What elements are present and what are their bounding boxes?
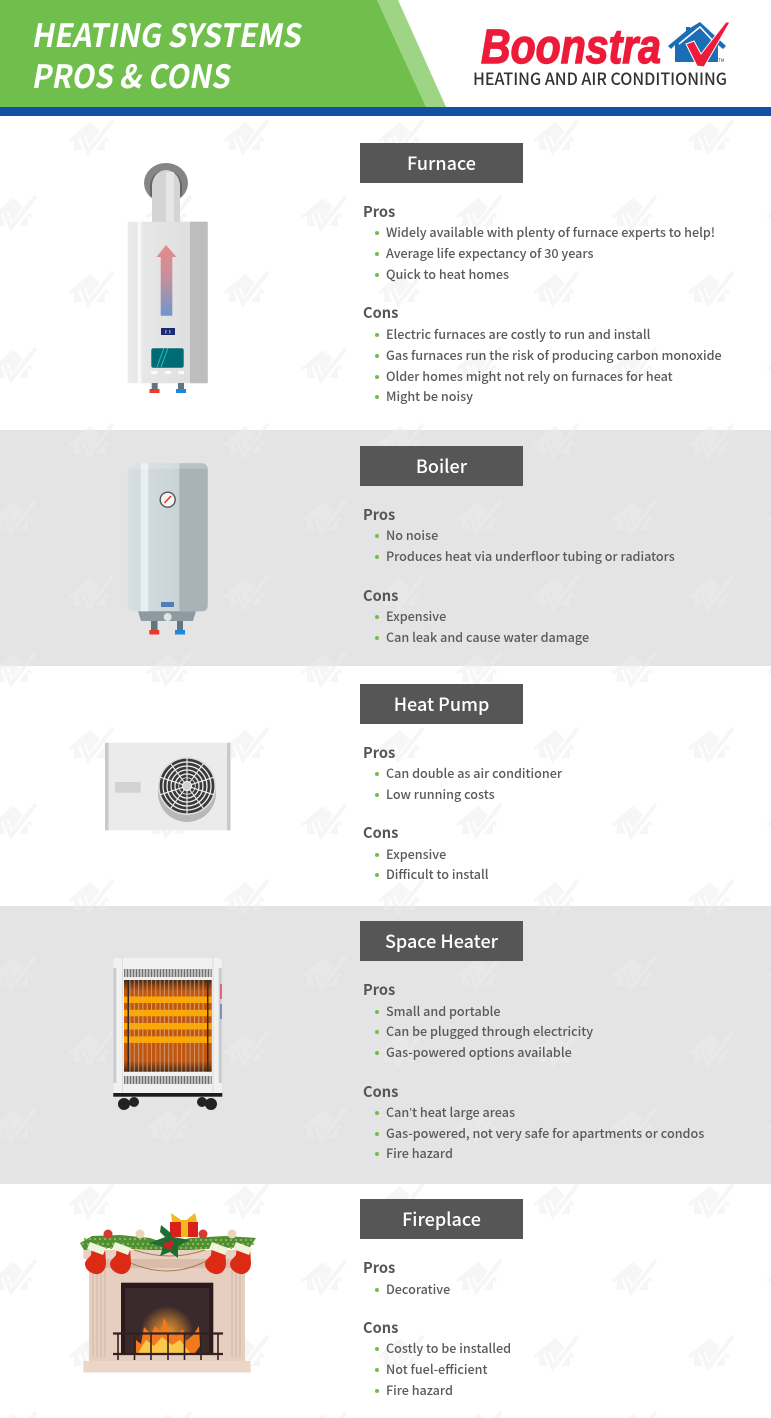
cons list: boiler: Expensive: [386, 606, 446, 625]
title: PROS & CONS: [30, 52, 236, 98]
pros list: boiler: Produces heat via underfloor tubing or radiators: [386, 546, 675, 565]
heading: fireplace: [360, 1199, 523, 1239]
panel: furnace: [360, 143, 722, 405]
cons list: space heater: [363, 1081, 704, 1162]
cons list: space heater: Can’t heat large areas: [386, 1102, 515, 1121]
panel: heat pump: [360, 684, 563, 883]
title: [30, 11, 307, 98]
heading: furnace: Furnace: [407, 150, 476, 176]
cons list: heat pump: Expensive: [386, 844, 446, 863]
stockings: [85, 1245, 106, 1274]
pros list: space heater: Can be plugged through electricity: [386, 1021, 593, 1040]
pros list: furnace: Quick to heat homes: [386, 264, 509, 283]
pros list: furnace: Pros: [363, 201, 395, 222]
pros list: space heater: [363, 979, 593, 1061]
header banner: [0, 0, 771, 116]
cons list: fireplace: Not fuel-efficient: [386, 1359, 487, 1378]
icon: heat pump: [105, 743, 230, 830]
heading: furnace: [360, 143, 523, 183]
icon: furnace: [128, 163, 208, 393]
cons list: fireplace: [363, 1317, 511, 1399]
pros list: fireplace: [363, 1257, 450, 1298]
cons list: boiler: Cons: [363, 585, 398, 606]
pros list: space heater: Pros: [363, 979, 395, 1000]
heading: space heater: [360, 921, 523, 961]
cons list: furnace: Might be noisy: [386, 386, 473, 405]
pros list: boiler: Pros: [363, 504, 395, 525]
icon: space heater: [113, 958, 222, 1110]
cons list: fireplace: Cons: [363, 1317, 398, 1338]
band: space heater background: [0, 906, 771, 1184]
cons list: boiler: [363, 585, 589, 646]
pros list: furnace: Average life expectancy of 30 years: [386, 243, 594, 262]
icon: boiler: [128, 463, 208, 634]
cons list: furnace: Cons: [363, 302, 398, 323]
band: boiler background: [0, 430, 771, 666]
heading: boiler: [360, 446, 523, 486]
pros list: fireplace: Pros: [363, 1257, 395, 1278]
logo: Boonstra: [481, 21, 661, 74]
pros list: space heater: Small and portable: [386, 1001, 501, 1020]
pros list: boiler: No noise: [386, 525, 438, 544]
cons list: furnace: Electric furnaces are costly to run and install: [386, 324, 651, 343]
cons list: space heater: Gas-powered, not very safe for apartments or condos: [386, 1123, 704, 1142]
heading: heat pump: [360, 684, 523, 724]
logo: [473, 21, 730, 90]
heading: space heater: Space Heater: [385, 928, 499, 954]
pros list: heat pump: Pros: [363, 742, 395, 763]
cons list: furnace: [363, 302, 722, 405]
cons list: fireplace: Costly to be installed: [386, 1338, 511, 1357]
cons list: space heater: Cons: [363, 1081, 398, 1102]
cons list: heat pump: [363, 822, 489, 883]
cons list: furnace: Gas furnaces run the risk of producing carbon monoxide: [386, 345, 722, 364]
cons list: space heater: Fire hazard: [386, 1143, 453, 1162]
logo: TM: [718, 58, 725, 64]
panel: boiler: [360, 446, 675, 646]
logo: HEATING AND AIR CONDITIONING: [473, 65, 727, 90]
pros list: fireplace: Decorative: [386, 1279, 450, 1298]
pros list: heat pump: Can double as air conditioner: [386, 763, 563, 782]
pros list: furnace: Widely available with plenty of furnace experts to help!: [386, 222, 715, 241]
pros list: boiler: [363, 504, 675, 565]
cons list: furnace: Older homes might not rely on furnaces for heat: [386, 366, 673, 385]
panel: space heater: [360, 921, 704, 1162]
pros list: heat pump: Low running costs: [386, 784, 495, 803]
pros list: space heater: Gas-powered options available: [386, 1042, 572, 1061]
cons list: boiler: Can leak and cause water damage: [386, 627, 589, 646]
icon: fireplace: [80, 1213, 256, 1372]
heading: boiler: Boiler: [416, 453, 468, 479]
cons list: heat pump: Difficult to install: [386, 864, 489, 883]
garland: [80, 1235, 256, 1250]
cons list: fireplace: Fire hazard: [386, 1380, 453, 1399]
heading: fireplace: Fireplace: [402, 1206, 481, 1232]
pros list: heat pump: [363, 742, 563, 803]
heading: heat pump: Heat Pump: [394, 691, 489, 717]
pros list: furnace: [363, 201, 715, 283]
title: HEATING SYSTEMS: [30, 11, 307, 57]
panel: fireplace: [360, 1199, 523, 1399]
cons list: heat pump: Cons: [363, 822, 398, 843]
